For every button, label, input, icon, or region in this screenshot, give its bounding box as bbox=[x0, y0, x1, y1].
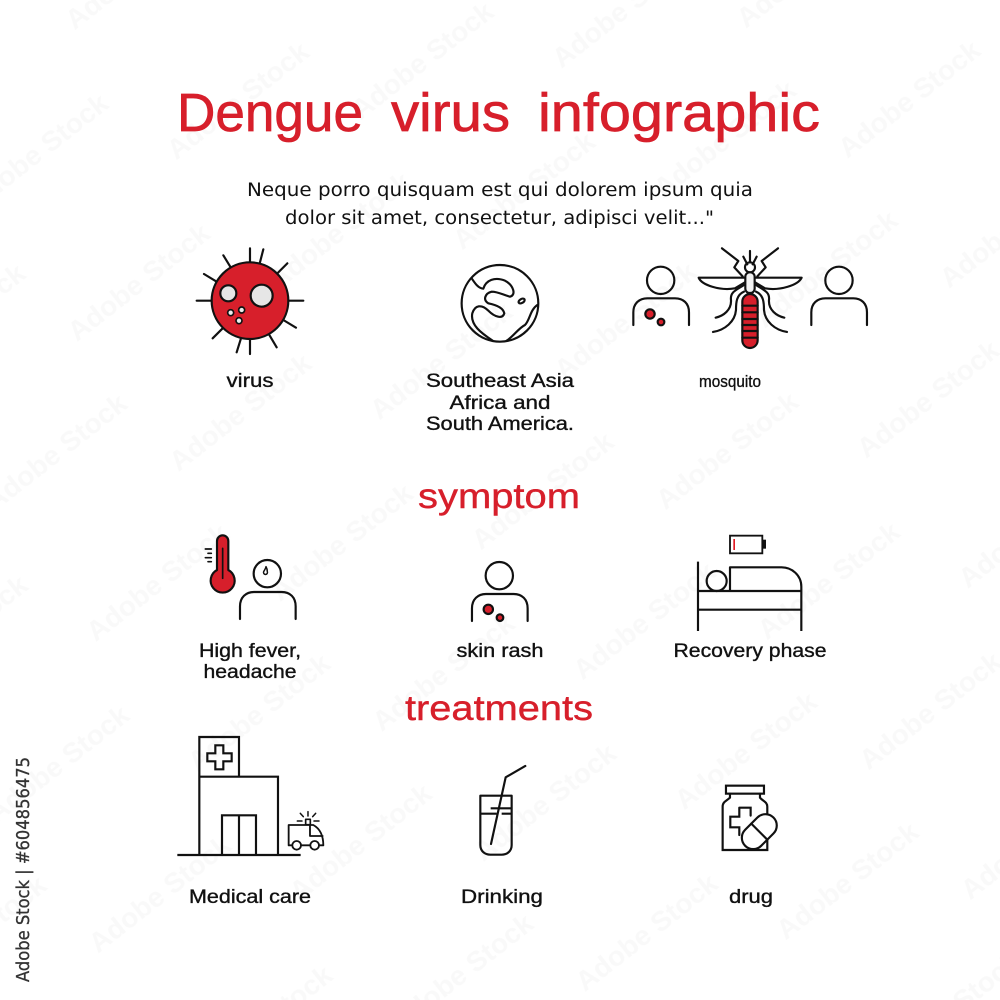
intro text: dolor sit amet, consectetur, adipisci velit..." bbox=[285, 208, 714, 229]
icon: low battery bbox=[730, 536, 766, 553]
icon: skin rash bbox=[472, 562, 528, 621]
title bbox=[177, 83, 820, 143]
intro text bbox=[247, 180, 753, 229]
label: drinking: Drinking bbox=[461, 887, 543, 908]
label: fever: High fever, bbox=[199, 641, 301, 662]
label: virus: virus bbox=[226, 371, 274, 392]
label: medical care: Medical care bbox=[189, 887, 311, 908]
stock credit: Adobe Stock | #604856475 bbox=[14, 757, 34, 982]
label: recovery: Recovery phase bbox=[674, 641, 826, 662]
intro text: Neque porro quisquam est qui dolorem ipsum quia bbox=[247, 180, 753, 201]
label: region bbox=[426, 371, 574, 435]
title: virus bbox=[391, 83, 510, 143]
icon: mosquito bbox=[699, 248, 802, 348]
heading: treatments: treatments bbox=[405, 689, 593, 728]
icon: bed bbox=[698, 562, 801, 631]
title: Dengue bbox=[177, 83, 363, 143]
icon: ambulance bbox=[289, 812, 323, 850]
icon: person with headache bbox=[240, 560, 296, 619]
label: fever bbox=[199, 641, 301, 683]
icon: globe bbox=[462, 265, 538, 342]
icon: thermometer bbox=[205, 535, 235, 593]
label: region: Africa and bbox=[450, 393, 550, 414]
icon: virus bbox=[197, 248, 303, 354]
label: drug: drug bbox=[729, 887, 773, 908]
label: mosquito: mosquito bbox=[699, 372, 761, 391]
icon: person bbox=[811, 267, 867, 325]
label: fever: headache bbox=[204, 662, 296, 683]
label: region: South America. bbox=[426, 414, 574, 435]
heading: symptom: symptom bbox=[418, 477, 580, 516]
icon: medicine jar bbox=[723, 786, 781, 854]
icon: person with rash bbox=[633, 267, 689, 325]
icon: glass with straw bbox=[480, 766, 525, 855]
label: region: Southeast Asia bbox=[426, 371, 574, 392]
icon: hospital bbox=[177, 737, 301, 855]
label: skin rash: skin rash bbox=[456, 641, 544, 662]
title: infographic bbox=[538, 83, 820, 143]
